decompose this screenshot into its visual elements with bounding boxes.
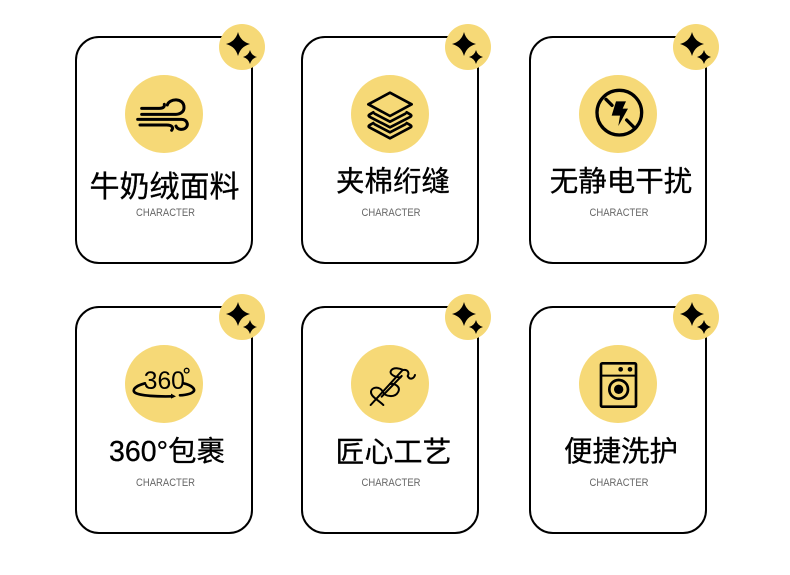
panel: 360 wrap	[76, 294, 265, 533]
subtitle: CHARACTER: CHARACTER	[136, 207, 195, 219]
icon: 360 rotation: 360	[144, 368, 185, 395]
panel: craftsmanship	[302, 294, 491, 533]
panel: quilted stitching	[302, 24, 491, 263]
title: 无静电干扰: 无静电干扰	[550, 166, 692, 198]
title: 便捷洗护: 便捷洗护	[564, 436, 678, 468]
icon: layers	[351, 75, 429, 153]
badge: sparkles	[219, 294, 265, 340]
badge: sparkles	[445, 294, 491, 340]
badge: sparkles	[219, 24, 265, 70]
icon: wind	[125, 75, 203, 153]
subtitle: CHARACTER: CHARACTER	[362, 207, 421, 219]
badge: sparkles	[673, 24, 719, 70]
badge: sparkles	[445, 24, 491, 70]
badge: sparkles	[673, 294, 719, 340]
subtitle: CHARACTER: CHARACTER	[362, 477, 421, 489]
panel: no static	[530, 24, 719, 263]
icon: washing machine	[579, 345, 657, 423]
title: 牛奶绒面料: 牛奶绒面料	[90, 171, 240, 204]
title: 360°包裹: 360°包裹	[109, 436, 225, 468]
icon: no static lightning	[579, 75, 657, 153]
subtitle: CHARACTER: CHARACTER	[136, 477, 195, 489]
subtitle: CHARACTER: CHARACTER	[590, 207, 649, 219]
subtitle: CHARACTER: CHARACTER	[590, 477, 649, 489]
panel: milk velvet fabric	[76, 24, 265, 263]
icon: needle and thread	[351, 345, 429, 423]
panel: easy wash	[530, 294, 719, 533]
title: 匠心工艺: 匠心工艺	[335, 436, 452, 469]
title: 夹棉绗缝: 夹棉绗缝	[336, 166, 450, 198]
icon: 360 rotation	[125, 345, 203, 423]
